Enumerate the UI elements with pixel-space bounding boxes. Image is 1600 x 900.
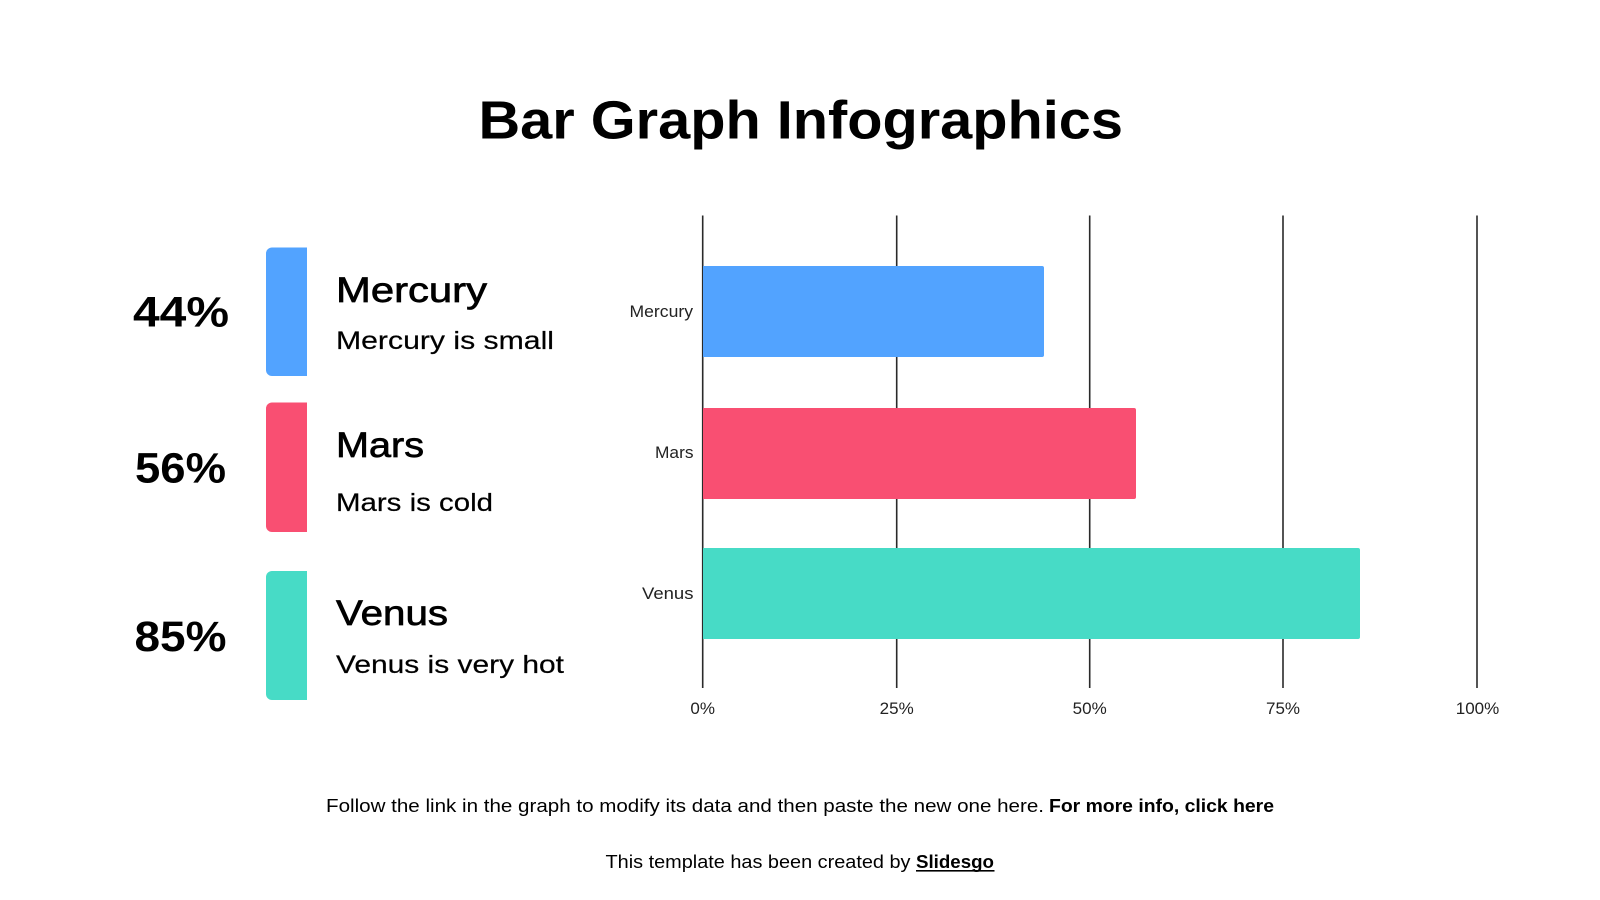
swatch: Mars	[266, 402, 307, 532]
credit line: This template has been created by	[606, 851, 911, 872]
bar: Venus 85%	[703, 548, 1360, 639]
percentage: Venus: 85%	[134, 613, 226, 661]
bar chart	[630, 216, 1499, 718]
heading: Mercury: Mercury	[336, 271, 488, 310]
axis labels: 100%	[1456, 699, 1499, 718]
category labels: Mercury	[630, 302, 694, 321]
axis labels: 75%	[1266, 699, 1300, 718]
percentage: Mercury: 44%	[133, 288, 229, 336]
footer note: Follow the link in the graph to modify its data and then paste the new one here.	[326, 795, 1044, 816]
heading: Mars: Mars	[336, 426, 424, 465]
category labels: Venus	[642, 584, 694, 603]
footer note: For more info, click here	[1049, 795, 1274, 816]
category labels: Mars	[655, 443, 694, 462]
title: Bar Graph Infographics	[478, 90, 1123, 150]
grid lines	[703, 216, 1477, 688]
axis labels: 0%	[690, 699, 715, 718]
bar: Mercury 44%	[703, 266, 1044, 357]
legend row: Venus	[134, 571, 564, 700]
legend row: Mars	[135, 402, 493, 532]
swatch: Venus	[266, 571, 307, 700]
category labels	[630, 302, 694, 603]
footer note	[326, 795, 1274, 816]
description: Venus: Venus is very hot	[336, 651, 564, 679]
axis labels: 50%	[1073, 699, 1107, 718]
heading: Venus: Venus	[336, 594, 448, 633]
description: Mars: Mars is cold	[336, 489, 493, 517]
axis labels: 25%	[880, 699, 914, 718]
description: Mercury: Mercury is small	[336, 327, 554, 355]
swatch: Mercury	[266, 248, 307, 376]
axis labels	[690, 699, 1499, 718]
panel: legend	[133, 248, 564, 700]
legend row: Mercury	[133, 248, 554, 376]
percentage: Mars: 56%	[135, 444, 226, 492]
bar: Mars 56%	[703, 408, 1136, 499]
credit line: Slidesgo	[916, 851, 994, 872]
